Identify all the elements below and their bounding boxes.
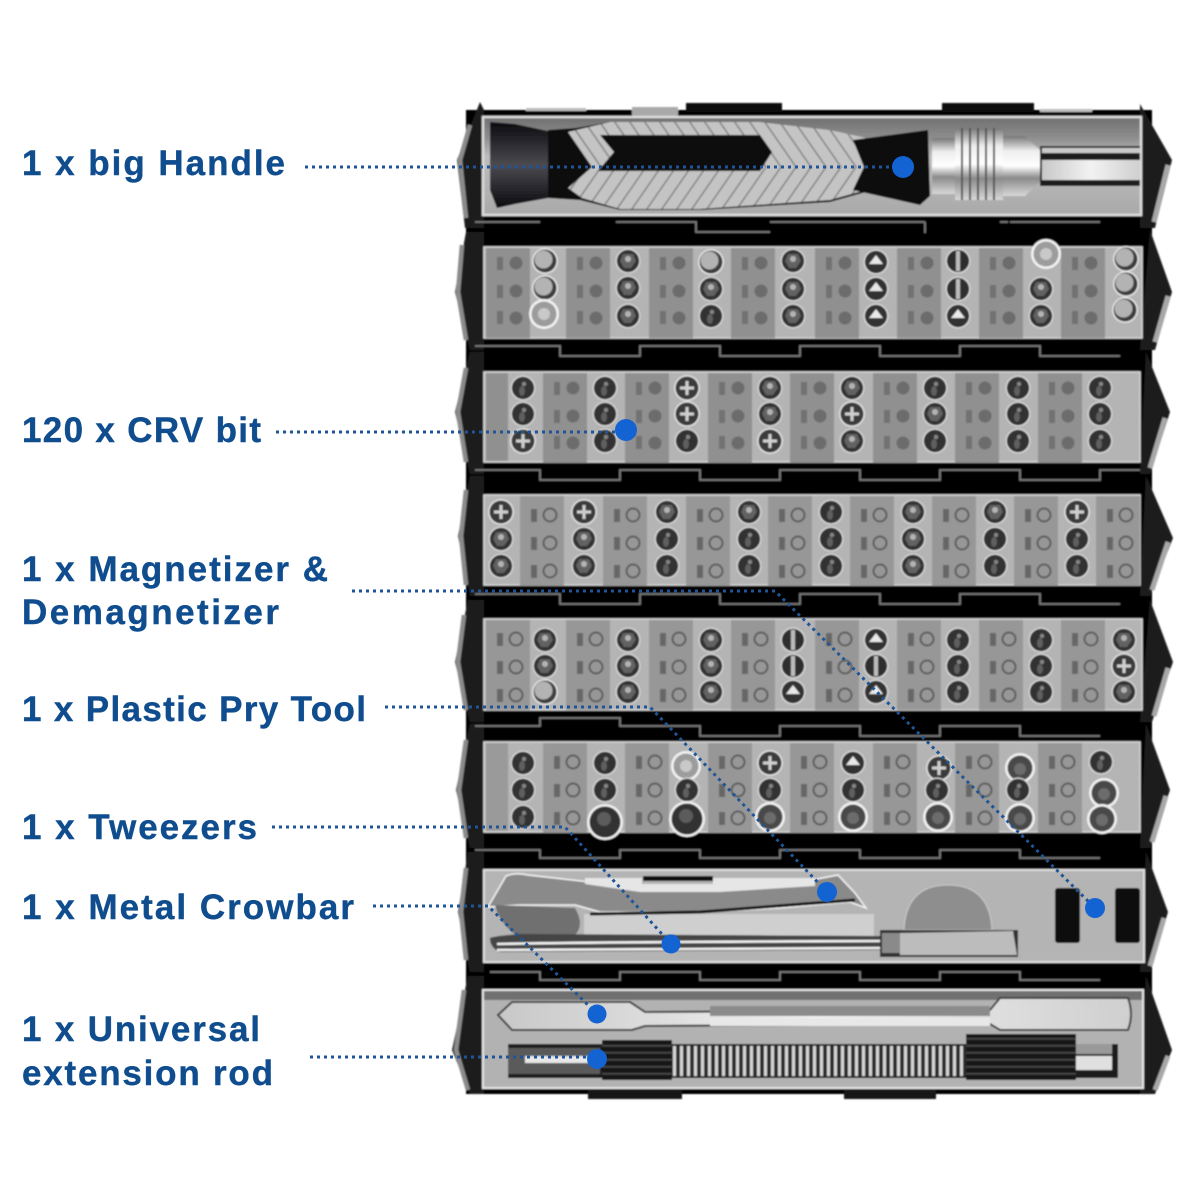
right hinged side panels: [1140, 104, 1173, 1094]
leader: CRV bit: [276, 419, 637, 441]
row 6: bit and socket tray: [484, 742, 1140, 840]
leader: big handle: [305, 156, 914, 178]
plastic pry tool: [488, 874, 866, 914]
toolbox case: [452, 102, 1173, 1099]
leader: metal crowbar: [373, 906, 606, 1024]
magnetizer dome: [904, 885, 992, 930]
lighter recess under pry tool: [584, 914, 874, 936]
tray base: [483, 990, 1143, 1088]
row 7: tools tray: [484, 870, 1144, 962]
grip chevrons: [568, 122, 880, 209]
tray base: [484, 870, 1144, 962]
leader: universal extension rod: [310, 1049, 607, 1069]
extension rod: [508, 1034, 1118, 1080]
row 8: crowbar and rod tray: [483, 990, 1143, 1088]
row 3: bit tray: [484, 372, 1140, 463]
label: universal extension rod: 1 x Universal: [22, 1010, 260, 1049]
handle end cap: [490, 122, 548, 208]
magnetizer holder: [880, 930, 1018, 957]
label: universal extension rod: extension rod: [22, 1054, 273, 1093]
tweezers: [490, 934, 880, 952]
bottom tabs: [588, 1090, 936, 1099]
shaft: [1040, 146, 1140, 186]
top tabs: [526, 103, 1092, 119]
magnetizer slot left: [1055, 888, 1080, 943]
label: CRV bit: 120 x CRV bit: [22, 411, 261, 450]
leader: magnetizer: [352, 591, 1105, 918]
hinge lines between rows: [475, 222, 1140, 980]
label: tweezers: 1 x Tweezers: [22, 808, 257, 847]
row 1: big handle tray: [483, 117, 1141, 215]
row 2: bit tray: [484, 239, 1142, 338]
metal crowbar: [498, 998, 1131, 1030]
pry tool spoon: [495, 905, 580, 938]
grip inlay: [598, 135, 772, 171]
row 4: bit tray: [484, 495, 1140, 586]
leader: plastic pry tool: [385, 707, 837, 902]
label: metal crowbar: 1 x Metal Crowbar: [22, 888, 354, 927]
left hinged side panels: [452, 102, 484, 1094]
label: magnetizer and demagnetizer: [22, 550, 328, 632]
handle grip: [548, 122, 866, 210]
leader: tweezers: [272, 827, 680, 954]
label: magnetizer and demagnetizer: Demagnetizer: [22, 593, 279, 632]
chrome collar: [932, 128, 1040, 200]
tray: [483, 117, 1141, 215]
label: big handle: 1 x big Handle: [22, 144, 285, 183]
row 5: bit tray: [484, 619, 1142, 710]
label: plastic pry tool: 1 x Plastic Pry Tool: [22, 690, 366, 729]
magnetizer slot right: [1115, 888, 1140, 943]
label: magnetizer and demagnetizer: 1 x Magnetizer &: [22, 550, 328, 589]
handle neck: [853, 130, 930, 205]
case body: [466, 110, 1152, 1094]
tray top shading: [484, 991, 1142, 1000]
label: universal extension rod: [22, 1010, 273, 1093]
